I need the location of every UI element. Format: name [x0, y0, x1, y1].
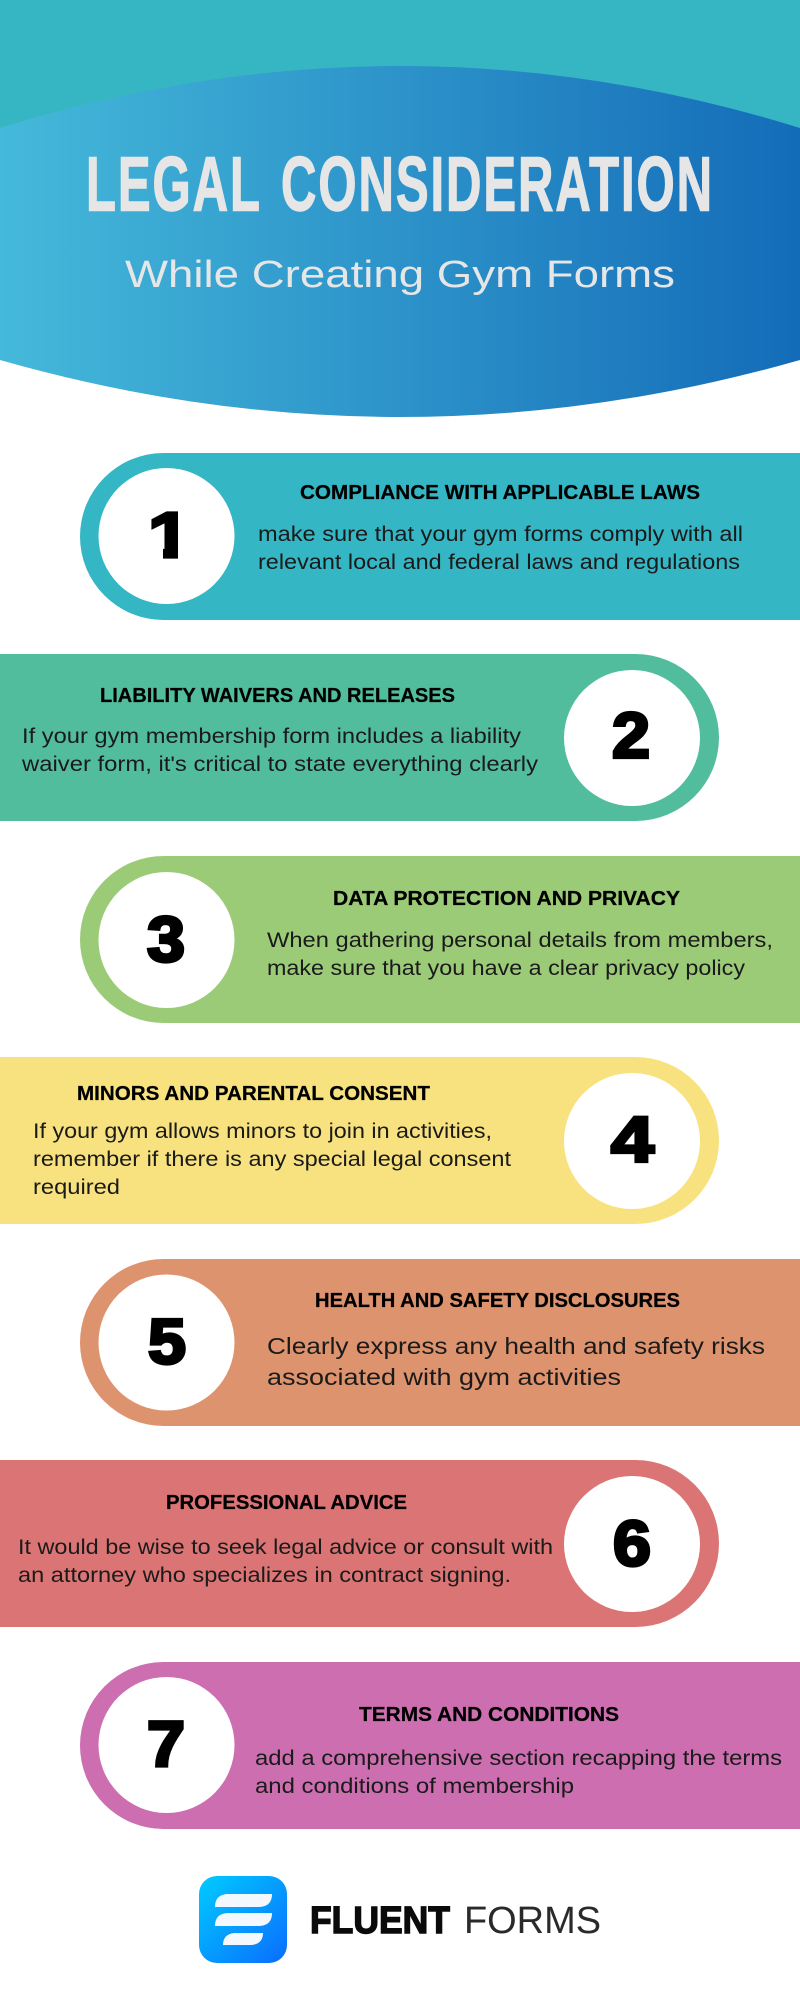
- panel 1 body: [258, 522, 743, 574]
- panel 4 body: [33, 1119, 511, 1199]
- panel: minors and parental consent: [0, 1057, 719, 1224]
- logo wordmark: FLUENT: [310, 1900, 450, 1942]
- number 7: 7: [147, 1708, 185, 1780]
- subtitle: While Creating Gym Forms: [125, 254, 675, 296]
- panel 2 background: [0, 654, 719, 821]
- panel: terms and conditions: [80, 1662, 800, 1829]
- panel 1 body: make sure that your gym forms comply with all: [258, 522, 743, 546]
- panel 1 background: [80, 453, 800, 620]
- panel: liability waivers and releases: [0, 654, 719, 821]
- panel 4 body: If your gym allows minors to join in activities,: [33, 1119, 492, 1143]
- number 5: 5: [148, 1306, 186, 1378]
- panel 1 heading: COMPLIANCE WITH APPLICABLE LAWS: [300, 482, 700, 504]
- logo: Fluent Forms: [199, 1876, 601, 1963]
- panel 4 body: required: [33, 1175, 120, 1199]
- panel 5 body: [267, 1333, 765, 1390]
- panel: data protection and privacy: [80, 856, 800, 1023]
- panel 7 background: [80, 1662, 800, 1829]
- panel 2 body: waiver form, it's critical to state everything clearly: [21, 752, 538, 776]
- panel 3 number circle: [98, 872, 234, 1008]
- panel 2 body: [21, 724, 538, 776]
- number 3: 3: [147, 904, 185, 976]
- panel 6 body: [18, 1535, 553, 1587]
- panel 4 number circle: [564, 1073, 700, 1209]
- panel 3 body: make sure that you have a clear privacy policy: [267, 956, 745, 980]
- panel 7 body: and conditions of membership: [255, 1774, 574, 1798]
- panel 5 body: associated with gym activities: [267, 1364, 621, 1390]
- panel 4 heading: MINORS AND PARENTAL CONSENT: [77, 1083, 430, 1105]
- panel 7 number circle: [98, 1677, 234, 1813]
- panel 6 body: an attorney who specializes in contract signing.: [18, 1563, 511, 1587]
- number 1: 1: [148, 499, 192, 571]
- panel 4 background: [0, 1057, 719, 1224]
- panel 2 body: If your gym membership form includes a liability: [22, 724, 521, 748]
- icon: Fluent Forms app icon: [199, 1876, 287, 1963]
- panel 5 background: [80, 1259, 800, 1426]
- panel 3 background: [80, 856, 800, 1023]
- panel 1 body: relevant local and federal laws and regulations: [258, 550, 740, 574]
- logo wordmark: [310, 1900, 601, 1942]
- panel 7 heading: TERMS AND CONDITIONS: [359, 1704, 619, 1726]
- panel 6 heading: PROFESSIONAL ADVICE: [166, 1492, 407, 1514]
- panel 3 body: [267, 928, 773, 980]
- header curved banner: [0, 66, 800, 417]
- panel: health and safety disclosures: [80, 1259, 800, 1426]
- panel 5 number circle: [98, 1274, 234, 1410]
- panel 5 heading: HEALTH AND SAFETY DISCLOSURES: [315, 1290, 680, 1312]
- panel 6 background: [0, 1460, 719, 1627]
- panel 3 body: When gathering personal details from members,: [267, 928, 773, 952]
- panel 2 number circle: [564, 670, 700, 806]
- panel 1 number circle: [98, 468, 234, 604]
- logo wordmark: FORMS: [464, 1900, 601, 1942]
- panel 7 body: [255, 1746, 782, 1798]
- panel 5 body: Clearly express any health and safety risks: [267, 1333, 765, 1359]
- panel 6 body: It would be wise to seek legal advice or consult with: [18, 1535, 553, 1559]
- number 2: 2: [612, 700, 650, 772]
- panel: compliance with applicable laws: [80, 453, 800, 620]
- panel 3 heading: DATA PROTECTION AND PRIVACY: [333, 888, 681, 910]
- number 6: 6: [613, 1508, 651, 1580]
- panel 4 body: remember if there is any special legal consent: [33, 1147, 511, 1171]
- header background band: [0, 0, 800, 135]
- header: [0, 0, 800, 417]
- panel 7 body: add a comprehensive section recapping the terms: [255, 1746, 782, 1770]
- panel 2 heading: LIABILITY WAIVERS AND RELEASES: [100, 685, 455, 707]
- number 4: 4: [611, 1104, 654, 1176]
- panel 6 number circle: [564, 1476, 700, 1612]
- panel: professional advice: [0, 1460, 719, 1627]
